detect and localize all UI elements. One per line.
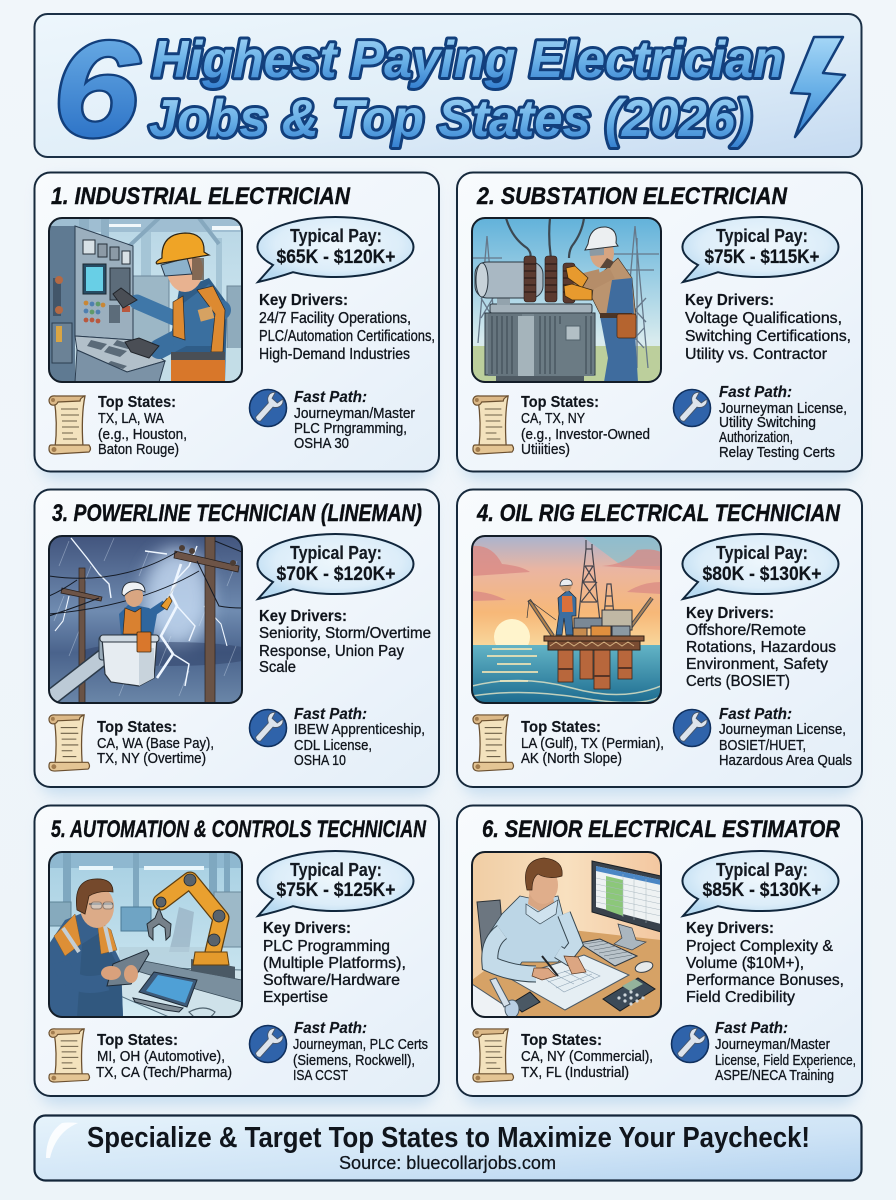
key drivers: Offshore/Remote — [686, 622, 806, 639]
key drivers: 24/7 Facility Operations, — [259, 310, 411, 327]
fast path: IBEW Apprenticeship, — [294, 722, 425, 738]
panel: senior electrical estimator — [457, 806, 862, 1096]
heading: 4. OIL RIG ELECTRICAL TECHNICIAN — [476, 500, 841, 527]
key drivers: PLC/Automation Certifications, — [259, 328, 435, 345]
key drivers: Project Complexity & — [686, 938, 833, 955]
icon: lightning bolt — [791, 37, 845, 137]
heading: 3. POWERLINE TECHNICIAN (LINEMAN) — [52, 500, 422, 527]
pay speech bubble — [682, 217, 838, 282]
illustration: technician with robot arm — [49, 852, 242, 1019]
panel: automation and controls technician — [34, 806, 439, 1096]
key drivers: Key Drivers: — [263, 920, 351, 937]
key drivers: Key Drivers: — [259, 292, 348, 309]
top states: Top States: — [98, 394, 176, 411]
icon: big number six: 6 — [53, 13, 141, 165]
top states — [521, 1032, 653, 1081]
top states: CA, TX, NY — [521, 410, 585, 427]
top states: LA (Gulf), TX (Permian), — [521, 735, 664, 752]
key drivers: Field Credibility — [686, 989, 795, 1006]
top states: TX, LA, WA — [98, 410, 164, 427]
pay speech bubble: $75K - $125K+ — [276, 880, 396, 901]
icon: wrench — [672, 1026, 708, 1062]
key drivers — [259, 292, 435, 363]
top states: Top States: — [97, 719, 177, 736]
top states: Top States: — [97, 1032, 178, 1049]
fast path: Fast Path: — [719, 706, 792, 723]
heading: 6. SENIOR ELECTRICAL ESTIMATOR — [482, 816, 841, 843]
pay speech bubble: $70K - $120K+ — [276, 564, 396, 585]
key drivers: (Multiple Platforms), — [263, 955, 406, 972]
key drivers — [685, 292, 851, 363]
illustration: lineman in bucket during storm — [49, 536, 259, 703]
top states — [96, 1032, 232, 1081]
key drivers: Rotations, Hazardous — [686, 639, 836, 656]
top states — [97, 719, 214, 767]
header banner — [34, 13, 862, 165]
top states: (e.g., Investor-Owned — [521, 426, 650, 443]
top states: CA, WA (Base Pay), — [97, 735, 214, 752]
top states: TX, CA (Tech/Pharma) — [96, 1064, 232, 1081]
key drivers: Response, Union Pay — [259, 643, 404, 660]
pay speech bubble: Typical Pay: — [290, 860, 382, 880]
key drivers: High-Demand Industries — [259, 346, 410, 363]
fast path: Journeyman/Master — [715, 1037, 830, 1053]
key drivers: Certs (BOSIET) — [686, 673, 790, 690]
top states: CA, NY (Commercial), — [521, 1048, 653, 1065]
heading: 2. SUBSTATION ELECTRICIAN — [476, 183, 788, 210]
illustration: offshore oil rig at sunset — [472, 536, 661, 703]
top states — [521, 719, 664, 767]
fast path: OSHA 30 — [294, 436, 349, 452]
title — [149, 31, 784, 148]
heading: 1. INDUSTRIAL ELECTRICIAN — [51, 183, 351, 210]
top states — [98, 394, 187, 458]
source line: Source: bluecollarjobs.com — [339, 1152, 556, 1173]
fast path — [293, 1020, 428, 1084]
fast path: Fast Path: — [719, 384, 792, 401]
icon: wrench — [250, 710, 286, 746]
fast path: CDL License, — [294, 738, 372, 754]
key drivers — [686, 920, 844, 1006]
panel: industrial electrician — [34, 172, 439, 472]
fast path: Authorization, — [719, 430, 793, 446]
key drivers: Key Drivers: — [259, 608, 347, 625]
heading: 5. AUTOMATION & CONTROLS TECHNICIAN — [51, 816, 426, 843]
top states: Baton Rouge) — [98, 441, 179, 458]
icon: scroll — [473, 396, 514, 454]
fast path — [294, 706, 425, 769]
key drivers: Environment, Safety — [686, 656, 828, 673]
pay speech bubble — [257, 534, 413, 599]
fast path: Fast Path: — [715, 1020, 788, 1037]
key drivers: PLC Programming — [263, 938, 390, 955]
top states: AK (North Slope) — [521, 750, 622, 767]
fast path: Hazardous Area Quals — [719, 753, 852, 769]
pay speech bubble — [257, 217, 413, 282]
pay speech bubble: Typical Pay: — [290, 543, 382, 563]
pay speech bubble: Typical Pay: — [716, 226, 808, 246]
key drivers: Expertise — [263, 989, 328, 1006]
fast path — [719, 706, 852, 769]
panel: oil rig electrical technician — [457, 490, 862, 787]
title: Highest Paying Electrician — [152, 31, 784, 89]
fast path: OSHA 10 — [294, 753, 346, 769]
fast path: Journeyman License, — [719, 401, 847, 417]
top states: TX, FL (Industrial) — [521, 1064, 629, 1081]
pay speech bubble: Typical Pay: — [716, 543, 808, 563]
top states: TX, NY (Overtime) — [97, 750, 206, 767]
key drivers: Seniority, Storm/Overtime — [259, 625, 431, 642]
icon: scroll — [49, 396, 90, 454]
fast path: Journeyman, PLC Certs — [293, 1037, 428, 1053]
key drivers: Key Drivers: — [686, 605, 774, 622]
key drivers: Volume ($10M+), — [686, 955, 804, 972]
icon: wrench — [250, 1026, 286, 1062]
footer banner — [34, 1116, 862, 1180]
panel: substation electrician — [457, 172, 862, 472]
fast path: ASPE/NECA Training — [715, 1068, 834, 1084]
key drivers: Utility vs. Contractor — [685, 346, 828, 363]
fast path — [715, 1020, 856, 1084]
key drivers — [263, 920, 406, 1006]
pay speech bubble: Typical Pay: — [290, 226, 382, 246]
fast path — [719, 384, 847, 461]
fast path: PLC Prngramming, — [294, 421, 407, 437]
fast path: License, Field Experience, — [715, 1053, 856, 1069]
key drivers: Key Drivers: — [686, 920, 774, 937]
top states — [521, 394, 650, 458]
icon: wrench — [674, 390, 710, 426]
illustration: substation worker at transformer — [472, 218, 661, 382]
fast path: (Siemens, Rockwell), — [293, 1053, 415, 1069]
key drivers: Switching Certifications, — [685, 328, 851, 345]
icon: scroll — [49, 715, 90, 771]
fast path: ISA CCST — [293, 1068, 348, 1084]
pay speech bubble — [682, 851, 838, 916]
pay speech bubble — [257, 851, 413, 916]
key drivers — [259, 608, 431, 676]
key drivers: Scale — [259, 659, 296, 676]
icon: scroll — [473, 715, 514, 771]
pay speech bubble — [682, 534, 838, 599]
closing message: Specialize & Target Top States to Maximize Your Paycheck! — [87, 1122, 810, 1154]
key drivers: Key Drivers: — [685, 292, 774, 309]
top states: Utiiities) — [521, 441, 570, 458]
pay speech bubble: $80K - $130K+ — [702, 564, 822, 585]
key drivers — [686, 605, 836, 690]
fast path: BOSIET/HUET, — [719, 738, 806, 754]
top states: MI, OH (Automotive), — [97, 1048, 225, 1065]
top states: (e.g., Houston, — [98, 426, 187, 443]
top states: Top States: — [521, 394, 599, 411]
title: Jobs & Top States (2026) — [149, 90, 752, 148]
icon: scroll — [49, 1029, 90, 1082]
top states: Top States: — [521, 1032, 602, 1049]
pay speech bubble: Typical Pay: — [716, 860, 808, 880]
panel: powerline technician — [34, 490, 439, 787]
fast path: Fast Path: — [294, 1020, 367, 1037]
icon: wrench — [250, 390, 286, 426]
fast path: Relay Testing Certs — [719, 445, 835, 461]
key drivers: Software/Hardware — [263, 972, 400, 989]
icon: scroll — [473, 1029, 514, 1082]
fast path — [294, 389, 415, 452]
key drivers: Performance Bonuses, — [686, 972, 844, 989]
fast path: Fast Path: — [294, 706, 367, 723]
key drivers: Voltage Qualifications, — [685, 310, 842, 327]
icon: wrench — [674, 710, 710, 746]
fast path: Journeyman/Master — [294, 406, 415, 422]
pay speech bubble: $75K - $115K+ — [704, 247, 820, 268]
fast path: Fast Path: — [294, 389, 367, 406]
illustration: electrician at control panel — [49, 218, 242, 382]
illustration: estimator at desk with blueprints — [472, 852, 661, 1018]
fast path: Journeyman License, — [719, 722, 846, 738]
pay speech bubble: $65K - $120K+ — [276, 247, 396, 268]
fast path: Utility Switching — [719, 415, 816, 431]
pay speech bubble: $85K - $130K+ — [702, 880, 822, 901]
top states: Top States: — [521, 719, 601, 736]
